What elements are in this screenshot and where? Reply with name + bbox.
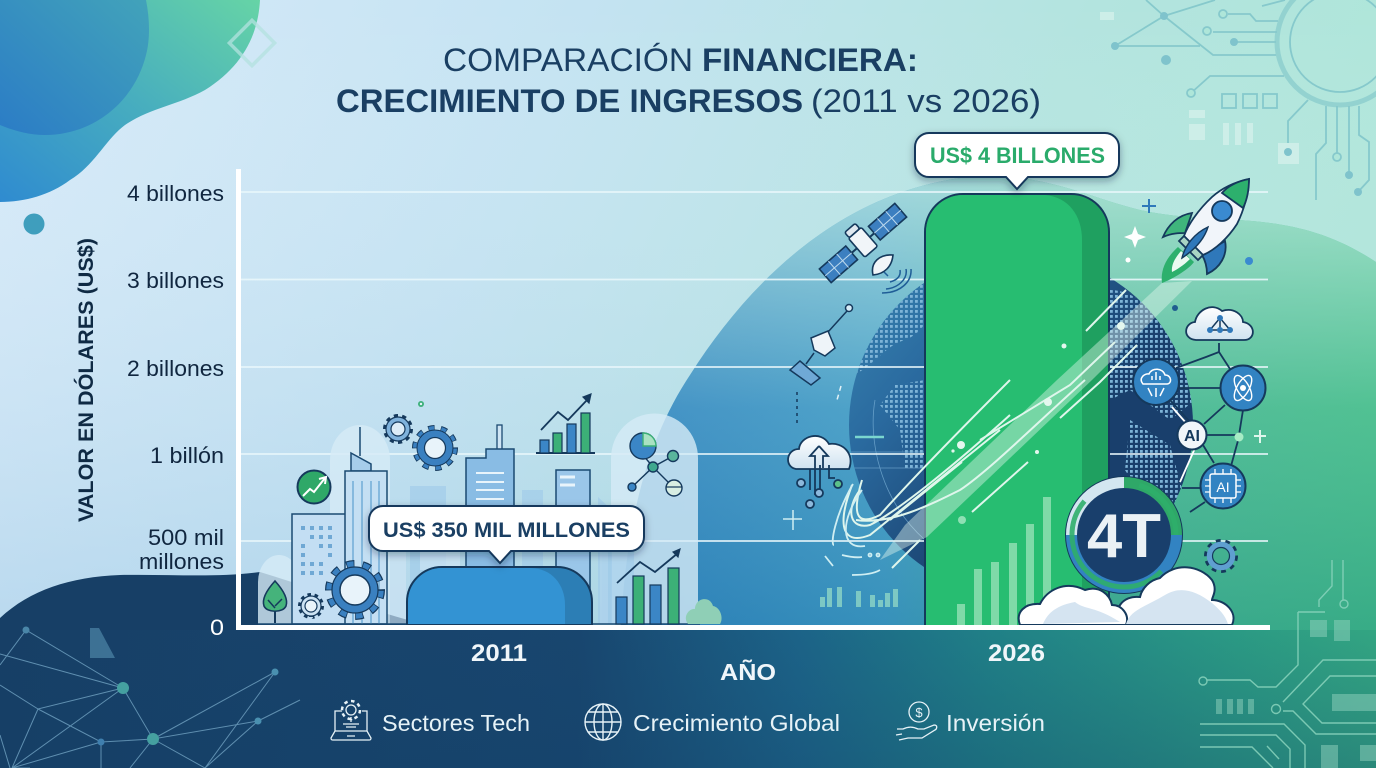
building D (556, 470, 590, 624)
icon: upload cloud (788, 436, 851, 508)
title: FINANCIERA: (702, 42, 918, 78)
icon: globe (585, 704, 621, 740)
callout: 2011 value (369, 506, 644, 563)
icon: green growth badge (298, 470, 330, 504)
title: COMPARACIÓN (443, 42, 693, 78)
left fin (1163, 213, 1192, 237)
rocket trail swoosh (844, 281, 1192, 568)
y axis labels: 1 billón (150, 443, 224, 468)
title: CRECIMIENTO DE INGRESOS (336, 83, 803, 119)
axes (236, 169, 1270, 630)
flame (1162, 247, 1194, 283)
faded buildings (390, 486, 634, 624)
bar: 2011 (407, 567, 592, 625)
title (336, 42, 1041, 119)
y axis labels: millones (139, 549, 224, 574)
x axis labels: AÑO (720, 658, 776, 685)
decoration: top-right circuit (1100, 0, 1376, 200)
decoration: bottom-left network (0, 626, 300, 768)
node: AI label (1178, 420, 1206, 450)
y axis labels: 4 billones (127, 181, 224, 206)
building B (345, 427, 387, 624)
satellite (812, 195, 911, 293)
callout: 2026 value (915, 133, 1119, 189)
x axis labels: 2011 (471, 640, 527, 667)
badge: 4T (1066, 477, 1182, 593)
icon: network with pie (628, 433, 682, 496)
network links (1170, 343, 1243, 512)
gridlines (240, 192, 1268, 541)
city illustration 2011 (258, 394, 722, 624)
sparkles (1124, 199, 1266, 443)
rocket (1162, 179, 1249, 283)
icon: big gear (330, 565, 380, 615)
label: Sectores Tech: Sectores Tech (382, 710, 530, 736)
window (1212, 201, 1232, 221)
icon: upper bar chart (536, 394, 595, 453)
icon: small gear bottom (300, 595, 322, 617)
decoration: bottom-right circuit (1199, 560, 1376, 768)
y axis title: VALOR EN DÓLARES (US$) (74, 238, 98, 522)
collar (1179, 236, 1203, 260)
y axis labels: 2 billones (127, 356, 224, 381)
icon: atom node (1220, 366, 1266, 410)
building C (466, 425, 514, 624)
ground line (258, 623, 700, 625)
background: bottom gradient (0, 630, 1376, 768)
icon: gear top small (385, 416, 411, 442)
x axis labels (471, 640, 1045, 685)
globe (849, 278, 1193, 567)
clouds (1019, 567, 1234, 625)
icon: laptop gear (331, 701, 371, 740)
bar: 2026 (925, 194, 1109, 626)
icon: network cloud (1186, 307, 1253, 340)
right fin (1202, 241, 1226, 274)
y axis labels (127, 181, 224, 640)
icon: bush (686, 599, 722, 624)
label: Crecimiento Global: Crecimiento Global (633, 710, 840, 736)
callout: 2011 value: US$ 350 MIL MILLONES (383, 519, 630, 542)
nose (1222, 179, 1249, 208)
y axis labels: 3 billones (127, 268, 224, 293)
y axis labels: 0 (210, 615, 224, 640)
legend (331, 701, 1045, 740)
probe (790, 304, 852, 425)
badge: 4T: 4T (1087, 502, 1161, 571)
icon: coin symbol: $ (915, 705, 923, 720)
node: AI label: AI (1184, 428, 1200, 445)
node: AI chip: AI (1216, 479, 1230, 495)
mini bars in 2026 bar (957, 497, 1051, 625)
icon: tree (263, 581, 287, 623)
icon: lower bar chart (616, 549, 680, 624)
icon: cloud data node (1133, 359, 1179, 405)
label: Inversión: Inversión (946, 710, 1045, 736)
center rod (1182, 227, 1208, 258)
building A (292, 514, 346, 624)
arches (258, 413, 698, 624)
icon: hand with coin (896, 702, 937, 740)
background: dome wave (620, 176, 1376, 768)
background: bottom band (0, 572, 1376, 768)
title: (2011 vs 2026) (811, 83, 1041, 119)
decoration: top-left blob (0, 0, 275, 234)
node: AI chip (1200, 464, 1246, 508)
x axis labels: 2026 (988, 640, 1045, 667)
small faded bars (820, 587, 898, 607)
y axis labels: 500 mil (148, 525, 224, 550)
motion arcs (783, 484, 880, 575)
icon: gear top large (415, 401, 455, 468)
callout: 2026 value: US$ 4 BILLONES (930, 143, 1105, 168)
body (1184, 179, 1249, 255)
AI network (1133, 307, 1266, 512)
icon: gear right (1206, 541, 1236, 571)
